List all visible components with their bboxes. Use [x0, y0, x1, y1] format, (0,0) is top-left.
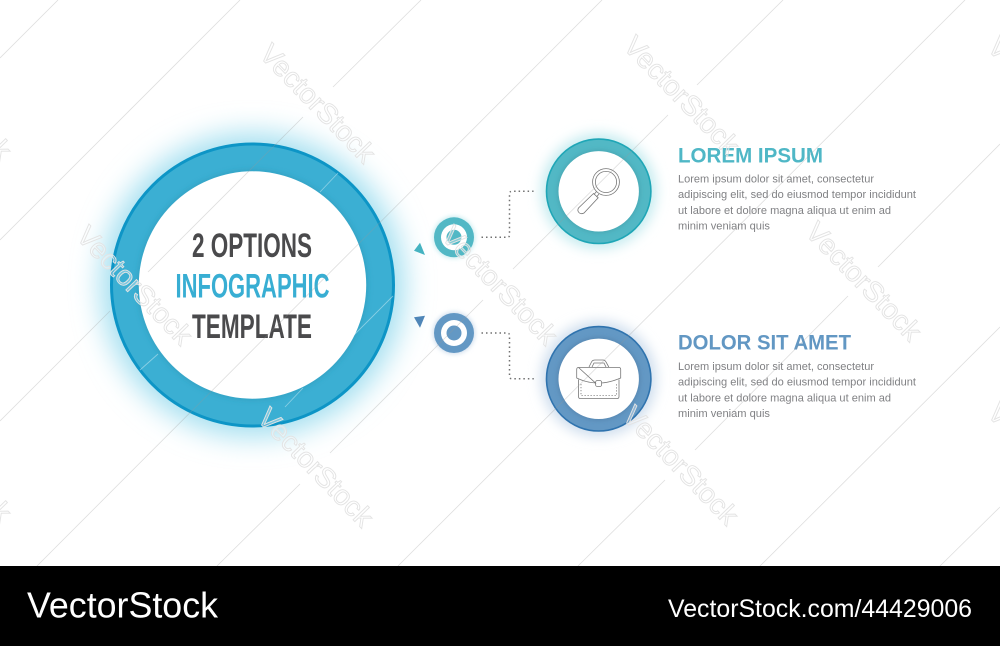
- main circle title: 2 OPTIONS: [192, 227, 312, 265]
- watermarks: [0, 30, 1000, 534]
- text block: lorem ipsum: adipiscing elit, sed do eiusmod tempor incididunt: [678, 189, 916, 201]
- dotted connector: blue: [482, 333, 535, 379]
- text block: lorem ipsum: ut labore et dolore magna aliqua ut enim ad: [678, 205, 891, 217]
- watermarks: VectorStock: [71, 220, 199, 352]
- footer logo text: VectorStock: [27, 584, 219, 625]
- main circle title: [176, 227, 330, 346]
- text block: dolor sit amet: ut labore et dolore magna aliqua ut enim ad: [678, 392, 891, 404]
- text block: dolor sit amet: adipiscing elit, sed do eiusmod tempor incididunt: [678, 377, 916, 389]
- footer bar: [0, 566, 1000, 646]
- icon: briefcase: [577, 360, 621, 399]
- arrow: teal pointer: [414, 243, 425, 255]
- option circle: blue briefcase: [541, 321, 657, 437]
- small node: blue: [433, 312, 475, 354]
- text block: lorem ipsum: LOREM IPSUM: [678, 144, 823, 167]
- text block: dolor sit amet: DOLOR SIT AMET: [678, 332, 851, 355]
- main circle title: INFOGRAPHIC: [176, 267, 330, 305]
- watermarks: VectorStock: [617, 400, 745, 532]
- option circle: teal magnifier: [541, 133, 657, 249]
- watermarks: VectorStock: [436, 220, 564, 352]
- main circle: [100, 133, 404, 437]
- small node: teal: [433, 216, 475, 258]
- watermarks: VectorStock: [800, 216, 928, 348]
- footer image id: VectorStock.com/44429006: [668, 595, 972, 623]
- text block: lorem ipsum: minim veniam quis: [678, 220, 770, 232]
- text block: dolor sit amet: Lorem ipsum dolor sit amet, consectetur: [678, 361, 874, 373]
- watermarks: VectorStock: [254, 38, 382, 170]
- icon: magnifier: [578, 169, 619, 214]
- watermarks: VectorStock: [618, 30, 746, 162]
- text block: dolor sit amet: minim veniam quis: [678, 408, 770, 420]
- watermarks: VectorStock: [252, 402, 380, 534]
- text block: dolor sit amet: [678, 332, 916, 420]
- text block: lorem ipsum: [678, 144, 916, 232]
- dotted connector: teal: [482, 191, 535, 237]
- main circle title: TEMPLATE: [192, 308, 312, 346]
- arrow: blue pointer: [414, 316, 425, 328]
- text block: lorem ipsum: Lorem ipsum dolor sit amet, consectetur: [678, 174, 874, 186]
